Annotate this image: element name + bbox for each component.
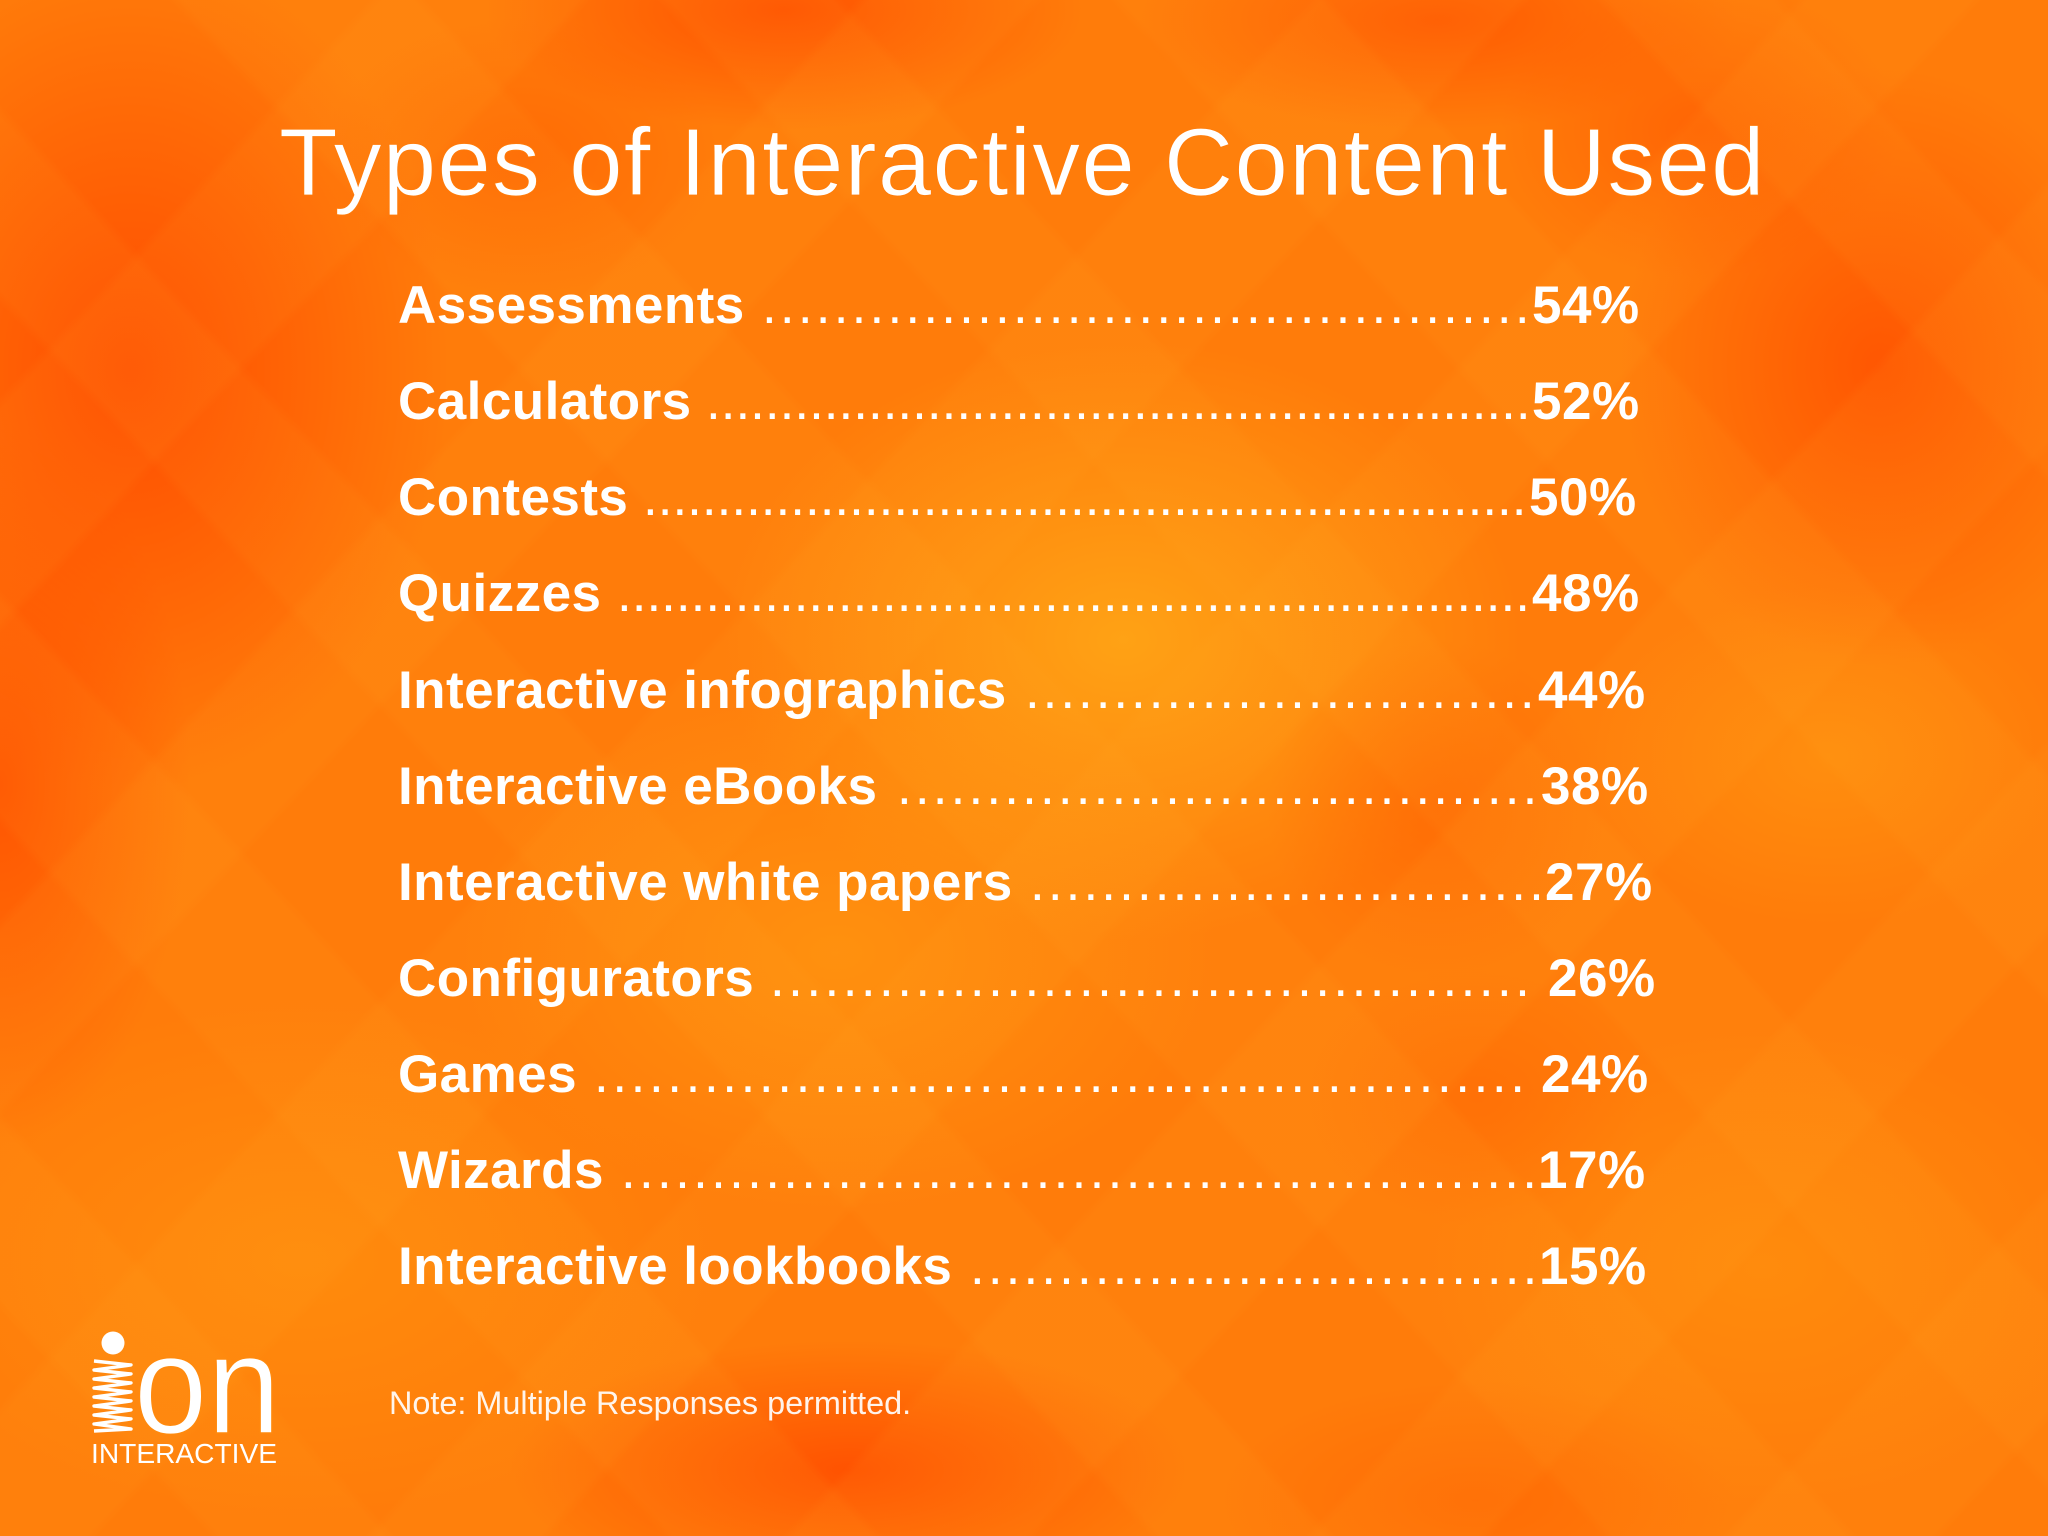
logo caption: INTERACTIVE [91,1438,277,1469]
list row: Assessments 54%: ........................................... [762,276,1533,335]
list row: Interactive infographics 44% [398,661,1646,720]
logo: ion interactive [91,1325,280,1469]
list row: Interactive lookbooks 15%: 15% [1539,1237,1647,1296]
list row: Assessments 54%: 54% [1532,276,1640,335]
list row: Interactive infographics 44%: Interactive infographics [398,661,1007,720]
list row: Configurators 26%: Configurators [398,949,754,1008]
list row: Games 24%: 24% [1541,1045,1649,1104]
list row: Interactive lookbooks 15% [398,1237,1647,1296]
list row: Wizards 17%: 17% [1538,1141,1646,1200]
list row: Interactive eBooks 38%: 38% [1541,757,1649,816]
list row: Calculators 52% [398,372,1640,431]
list row: Interactive eBooks 38% [398,757,1649,816]
list row: Contests 50%: 50% [1529,468,1637,527]
list row: Games 24%: ................................................... [594,1045,1529,1104]
list row: Interactive white papers 27%: ............................. [1030,853,1547,912]
note text: Note: Multiple Responses permitted. [389,1385,911,1421]
list row: Contests 50%: ............................................................ [643,468,1527,527]
list row: Interactive infographics 44%: 44% [1538,661,1646,720]
list row: Interactive white papers 27%: 27% [1545,853,1653,912]
list row: Calculators 52%: Calculators [398,372,692,431]
title: Types of Interactive Content Used [279,109,1766,216]
list row: Contests 50%: Contests [398,468,628,527]
list row: Configurators 26% [398,949,1656,1008]
list row: Interactive lookbooks 15%: Interactive lookbooks [398,1237,952,1296]
list row: Calculators 52%: ........................................................ [706,372,1531,431]
list row: Calculators 52%: 52% [1532,372,1640,431]
list row: Quizzes 48%: 48% [1532,564,1640,623]
list row: Interactive lookbooks 15%: ................................ [970,1237,1540,1296]
list row: Interactive eBooks 38%: .................................... [897,757,1541,816]
list row: Wizards 17%: ................................................... [621,1141,1540,1200]
list row: Configurators 26%: .......................................... [770,949,1533,1008]
list row: Games 24%: Games [398,1045,577,1104]
list row: Quizzes 48%: Quizzes [398,564,601,623]
list row: Wizards 17%: Wizards [398,1141,604,1200]
list row: Assessments 54% [398,276,1640,335]
list row: Quizzes 48%: .............................................................. [617,564,1530,623]
list row: Interactive white papers 27% [398,853,1653,912]
list row: Interactive eBooks 38%: Interactive eBooks [398,757,877,816]
logo spring [94,1361,131,1431]
logo dot [102,1332,124,1354]
list row: Interactive white papers 27%: Interactive white papers [398,853,1013,912]
list row: Assessments 54%: Assessments [398,276,745,335]
list row: Configurators 26%: 26% [1548,949,1656,1008]
list row: Interactive infographics 44%: ............................. [1025,661,1538,720]
